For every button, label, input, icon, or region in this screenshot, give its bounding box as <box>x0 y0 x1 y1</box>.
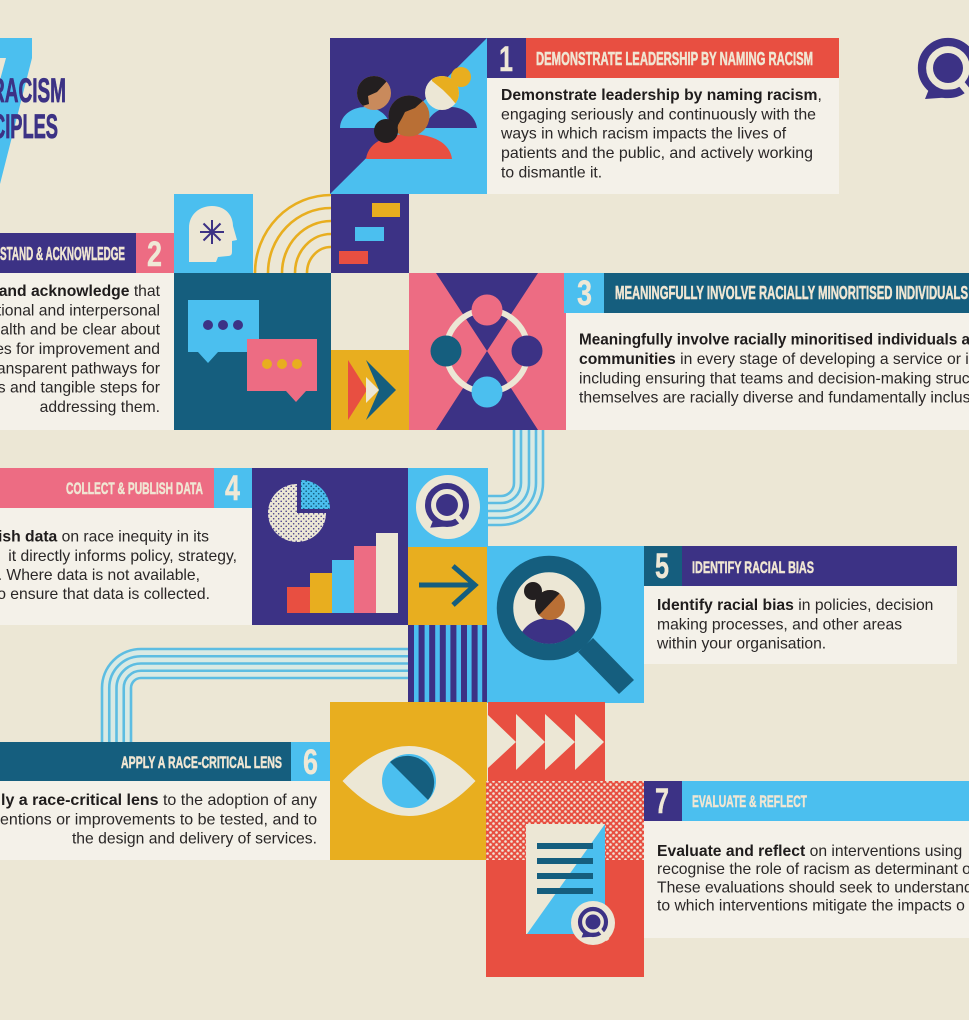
text block 2: addressing them. <box>40 399 160 416</box>
number badge 2 <box>136 233 174 274</box>
pipes: connector from step 3 to step 4 <box>488 430 543 525</box>
text block 2: alth and be clear about <box>0 322 161 339</box>
text block 2: es for improvement and <box>0 341 160 358</box>
text block 1: Demonstrate leadership by naming racism, <box>501 87 822 104</box>
number badge 1 <box>487 38 526 79</box>
text block 2 <box>0 273 174 430</box>
text block 1: engaging seriously and continuously with the <box>501 106 816 123</box>
chevrons tile <box>488 702 605 781</box>
panel: step 4 collect and publish data <box>0 468 488 625</box>
text block 7: These evaluations should seek to understand <box>657 879 969 896</box>
text block 4: . Where data is not available, <box>0 567 200 584</box>
number badge 5 <box>644 546 682 586</box>
heading 1: DEMONSTRATE LEADERSHIP BY NAMING RACISM <box>536 49 813 69</box>
number badge 1: 1 <box>499 40 513 79</box>
text block 1: to dismantle it. <box>501 164 602 181</box>
heading 5 <box>682 546 957 586</box>
heading 2 <box>0 233 136 273</box>
heading 3 <box>604 273 969 313</box>
icon: logo tile <box>408 468 488 547</box>
text block 7: Evaluate and reflect on interventions using <box>657 843 962 860</box>
text block 3: including ensuring that teams and decision-making struc <box>579 370 969 387</box>
heading 2: STAND & ACKNOWLEDGE <box>0 244 125 264</box>
number badge 2: 2 <box>147 235 162 274</box>
text block 6: entions or improvements to be tested, and to <box>0 811 317 828</box>
text block 1: patients and the public, and actively working <box>501 145 813 162</box>
illustration: three people <box>330 38 487 194</box>
heading 4: COLLECT & PUBLISH DATA <box>66 480 203 498</box>
title: anti-racism principles <box>0 38 66 184</box>
number badge 3: 3 <box>577 274 592 313</box>
text block 1: ways in which racism impacts the lives of <box>500 126 787 143</box>
heading 5: IDENTIFY RACIAL BIAS <box>692 559 814 577</box>
heading 6: APPLY A RACE-CRITICAL LENS <box>121 754 282 772</box>
illustration: eye <box>330 702 487 860</box>
text block 5: within your organisation. <box>656 636 826 653</box>
number badge 3 <box>564 273 604 313</box>
stripes tile <box>408 625 488 703</box>
number badge 4: 4 <box>225 469 240 508</box>
number badge 5: 5 <box>655 547 669 586</box>
panel: step 6 apply a race-critical lens <box>0 702 487 860</box>
panel: step 7 evaluate and reflect <box>486 702 969 977</box>
text block 2: ansparent pathways for <box>0 360 160 377</box>
pipes: connector from step 4 to step 6 <box>102 649 408 742</box>
text block 6 <box>0 781 330 860</box>
text block 4: it directly informs policy, strategy, <box>8 548 237 565</box>
text block 3: themselves are racially diverse and fundamentally inclus <box>579 390 969 407</box>
heading 7: EVALUATE & REFLECT <box>692 793 807 811</box>
chart: pie and bars <box>252 468 408 625</box>
text block 5: Identify racial bias in policies, decision <box>657 597 933 614</box>
text block 2: s and tangible steps for <box>0 380 160 397</box>
logo: top right <box>922 42 969 104</box>
icon: chevron tile <box>331 350 409 430</box>
icon: stacked bars tile <box>331 194 409 273</box>
text block 4 <box>0 508 252 625</box>
illustration: connected circles <box>409 273 566 430</box>
text block 7: to which interventions mitigate the impacts o <box>657 898 965 914</box>
text block 6: the design and delivery of services. <box>72 831 317 848</box>
panel: step 1 demonstrate leadership <box>330 38 839 194</box>
text block 5 <box>644 586 957 664</box>
icon: speech bubbles <box>174 273 331 430</box>
text block 7 <box>644 821 969 938</box>
text block 7: recognise the role of racism as determinant o <box>657 861 969 878</box>
illustration: document with logo stamp <box>486 781 644 977</box>
icon: head with asterisk <box>174 194 253 273</box>
text block 2: tional and interpersonal <box>0 302 160 319</box>
text block 3 <box>566 313 969 430</box>
heading 4 <box>0 468 214 508</box>
text block 5: making processes, and other areas <box>657 616 902 633</box>
big numeral seven <box>0 38 32 184</box>
text block 1 <box>487 78 839 194</box>
heading 7 <box>682 781 969 821</box>
text block 3: Meaningfully involve racially minoritised individuals a <box>579 332 969 348</box>
icon: arrow tile <box>408 547 487 625</box>
number badge 6 <box>291 742 330 782</box>
panel: step 2 understand and acknowledge <box>0 194 409 430</box>
heading 6 <box>0 742 291 781</box>
text block 4: o ensure that data is collected. <box>0 586 210 603</box>
title text <box>0 72 66 146</box>
number badge 6: 6 <box>303 743 318 782</box>
number badge 7 <box>644 781 682 821</box>
number badge 4 <box>214 468 252 508</box>
heading 1 <box>526 38 839 78</box>
text block 6: ly a race-critical lens to the adoption of any <box>1 792 317 809</box>
panel: step 3 meaningfully involve <box>409 273 969 430</box>
text block 3: communities in every stage of developing a service or i <box>579 351 969 368</box>
pie chart <box>268 480 330 542</box>
text block 2: and acknowledge that <box>0 283 161 300</box>
number badge 7: 7 <box>655 782 669 821</box>
arcs: gold connector <box>255 195 331 273</box>
bar chart <box>287 533 398 613</box>
text block 4: ish data on race inequity in its <box>0 528 209 546</box>
illustration: magnifying glass with person <box>487 546 644 703</box>
panel: step 5 identify racial bias <box>408 546 957 703</box>
